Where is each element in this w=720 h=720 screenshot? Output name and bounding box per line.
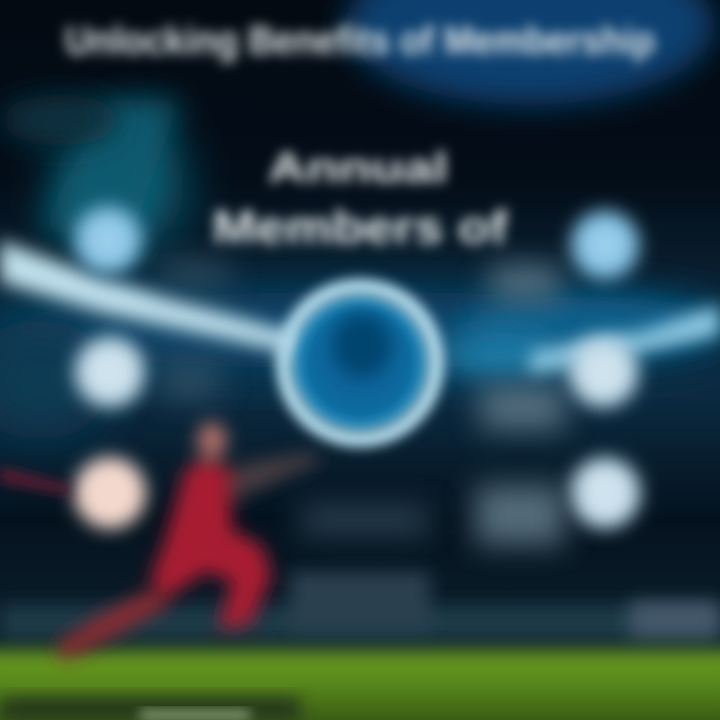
icon circle: bottom left <box>74 457 146 529</box>
light streak right <box>530 305 720 375</box>
title: Unlocking Benefits of Membership <box>65 19 655 63</box>
text block: right labels <box>475 265 565 545</box>
heading <box>212 144 508 253</box>
streak: red accent <box>0 467 70 495</box>
light streak left <box>0 240 300 355</box>
runner in red <box>55 422 320 660</box>
icon circle: bottom right <box>569 457 641 529</box>
text block: left labels <box>160 260 430 535</box>
grass field <box>0 650 720 720</box>
central ring <box>284 287 436 439</box>
icon circle: top right <box>570 210 640 280</box>
icon circle: middle right <box>567 336 639 408</box>
heading: Members of <box>212 201 508 253</box>
icon circle: top left <box>73 205 143 275</box>
heading: Annual <box>268 144 448 191</box>
icon circle: middle left <box>74 336 146 408</box>
